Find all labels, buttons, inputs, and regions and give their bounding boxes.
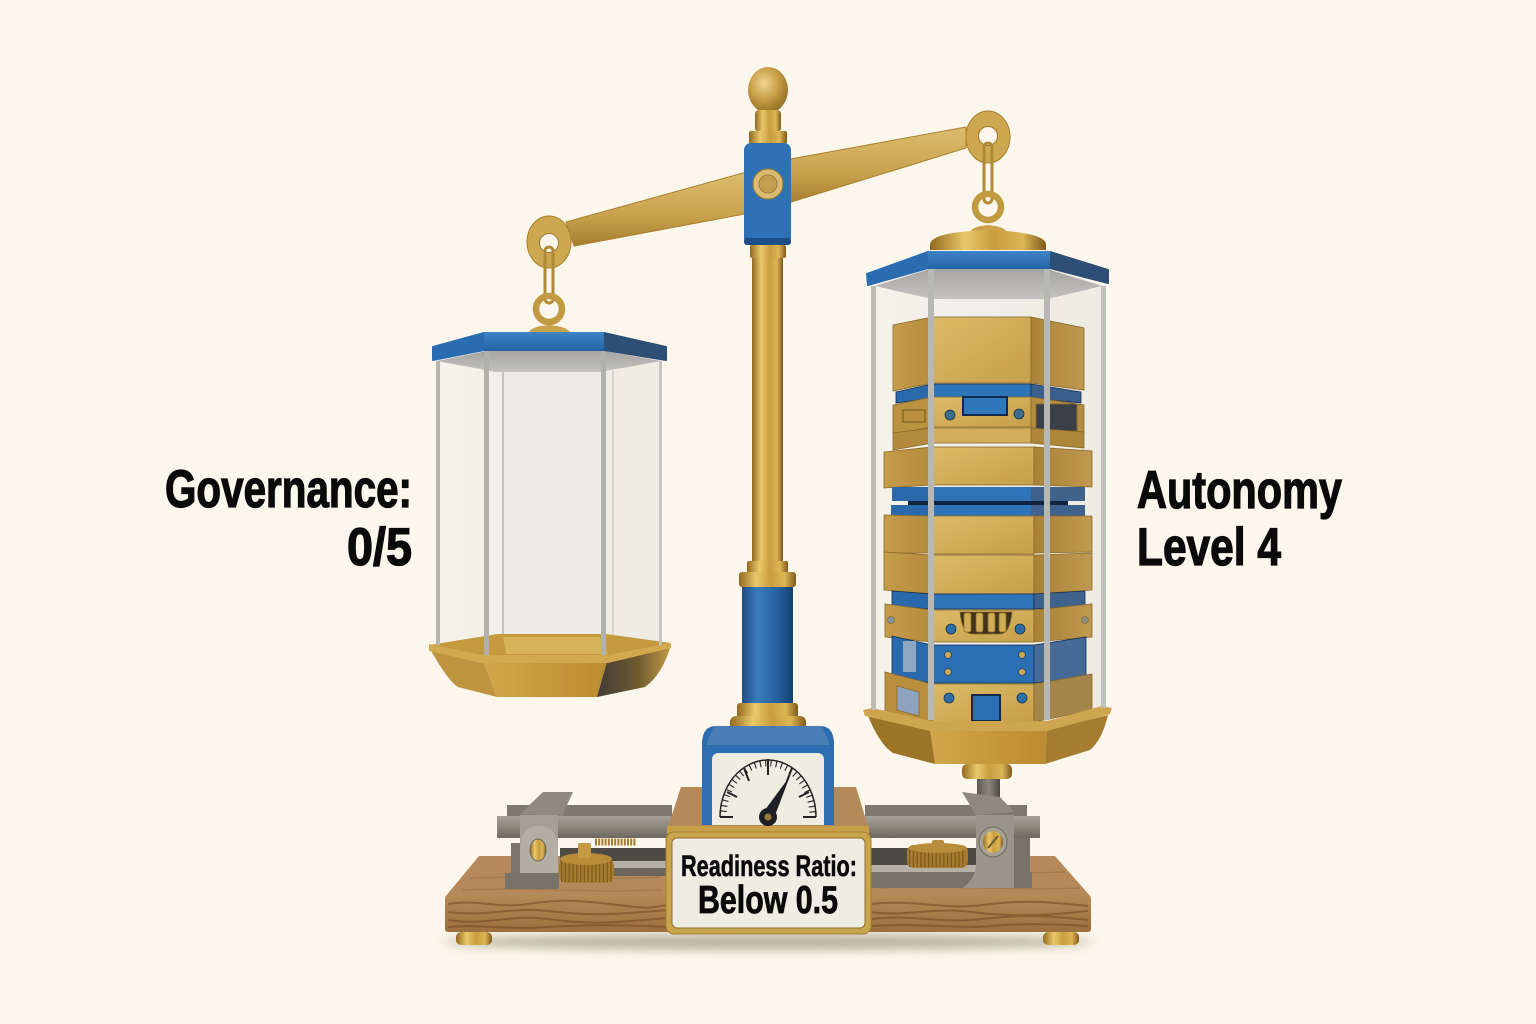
beam	[527, 111, 1010, 268]
major ticks	[720, 759, 816, 817]
readiness ratio plaque: Below 0.5	[698, 879, 838, 922]
needle	[762, 776, 790, 818]
block 9	[884, 552, 1092, 594]
glass panels	[437, 350, 661, 655]
block 2: blue band	[896, 384, 1081, 403]
gauge	[702, 726, 834, 826]
lower collar	[739, 572, 796, 587]
base collar	[730, 703, 806, 737]
label: governance: 0/5	[347, 518, 412, 577]
left hanger	[529, 247, 570, 332]
upper collar	[747, 561, 788, 573]
left glass case: empty (governance)	[429, 332, 671, 697]
housing	[702, 726, 834, 825]
block 12: blue module	[892, 636, 1086, 683]
block 5	[884, 447, 1092, 488]
block 3: notched module	[893, 397, 1084, 434]
right hanger	[970, 143, 1007, 232]
lid	[867, 251, 1108, 285]
hardware stack	[884, 317, 1092, 722]
right bracket and pin	[962, 778, 1030, 888]
wood base	[445, 856, 1091, 945]
tray	[863, 706, 1112, 764]
gold post	[752, 250, 783, 564]
underside	[437, 351, 661, 372]
finial	[748, 67, 788, 144]
block 13: door module	[885, 672, 1092, 722]
left gear	[559, 842, 636, 883]
block 6-7: blue pair	[891, 487, 1085, 516]
dial arc	[720, 760, 816, 817]
left bracket	[505, 792, 573, 889]
left rails	[497, 805, 672, 876]
dial face	[712, 753, 824, 825]
block 1	[893, 317, 1084, 391]
label: autonomy: Level 4	[1137, 518, 1281, 577]
tray stem	[962, 764, 1012, 779]
lid cap	[930, 230, 1046, 250]
mechanism: rails, brackets and gears	[445, 778, 1091, 945]
front posts	[871, 269, 1106, 720]
back posts	[502, 371, 614, 635]
hub	[759, 808, 777, 826]
right glass case: full (autonomy)	[863, 230, 1112, 779]
readiness ratio plaque	[666, 832, 871, 934]
front posts	[436, 351, 662, 655]
ground shadow	[443, 934, 1093, 950]
readiness ratio plaque: Readiness Ratio:	[681, 850, 857, 883]
tray	[429, 634, 671, 697]
label: governance	[165, 460, 412, 577]
block 8	[884, 515, 1092, 554]
pivot block	[744, 143, 791, 258]
right rails	[865, 805, 1040, 888]
minor ticks	[724, 764, 812, 817]
lid	[433, 332, 666, 360]
block 10: blue band	[892, 591, 1085, 609]
block 4	[893, 428, 1084, 450]
label: autonomy: Autonomy	[1137, 461, 1342, 520]
label: governance: Governance:	[165, 460, 412, 519]
glass panels	[873, 268, 1103, 722]
right gear	[907, 840, 968, 868]
central pillar	[730, 250, 806, 737]
gauge housing plinth	[667, 787, 869, 834]
blue column	[742, 587, 793, 704]
block 11: connector module	[885, 604, 1092, 642]
label: autonomy	[1137, 461, 1342, 577]
underside	[875, 269, 1102, 299]
